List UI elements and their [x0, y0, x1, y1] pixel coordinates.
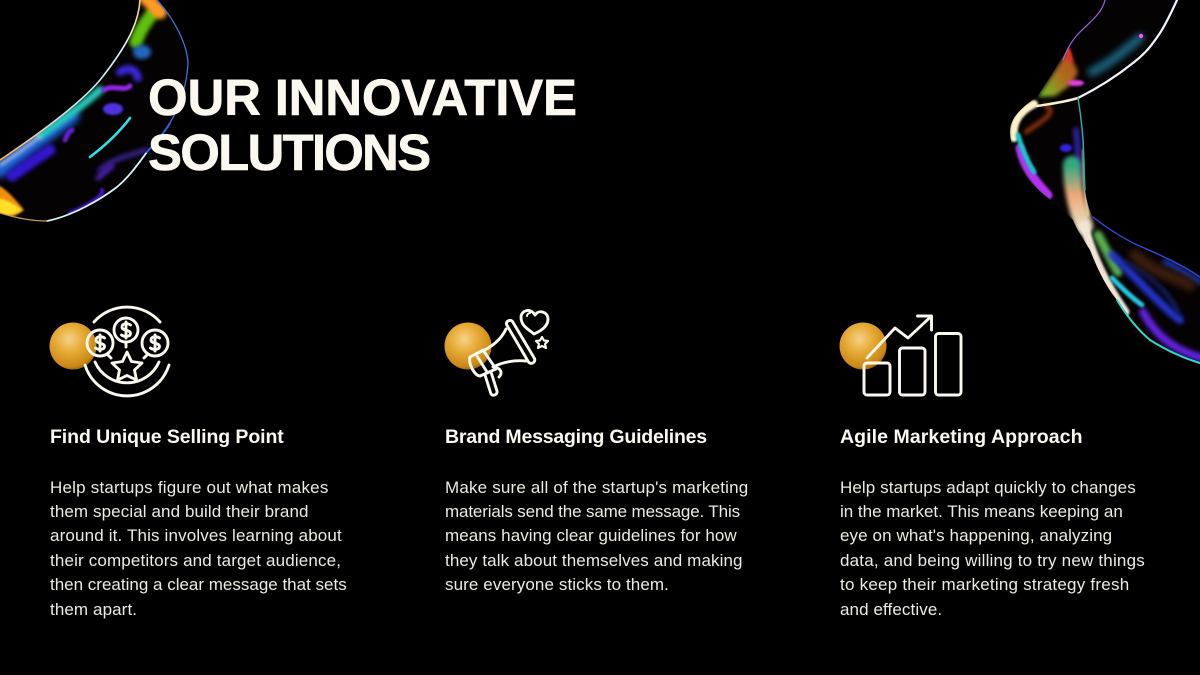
body text: them apart. — [50, 600, 137, 619]
body text: Help startups adapt quickly to changes — [840, 478, 1136, 496]
icon: megaphone with heart — [444, 309, 550, 397]
bubble: top-left iridescent film — [0, 0, 189, 222]
body text: eye on what's happening, analyzing — [840, 526, 1112, 545]
body text: they talk about themselves and making — [445, 551, 743, 570]
body text: Help startups figure out what makes — [50, 478, 329, 496]
body text: sure everyone sticks to them. — [445, 575, 669, 594]
body text — [840, 478, 1145, 619]
body text: materials send the same message. This — [445, 502, 740, 521]
body text: then creating a clear message that sets — [50, 575, 347, 594]
panel: agile marketing approach — [840, 314, 1145, 619]
body text: their competitors and target audience, — [50, 551, 341, 570]
heading: Find Unique Selling Point — [50, 426, 284, 448]
body text — [445, 478, 748, 594]
body text: to keep their marketing strategy fresh — [840, 575, 1129, 594]
title: SOLUTIONS — [148, 124, 429, 181]
body text: in the market. This means keeping an — [840, 502, 1123, 521]
title: OUR INNOVATIVE — [148, 69, 577, 126]
panel: brand messaging guidelines — [444, 309, 748, 594]
body text — [50, 478, 347, 619]
panel: find unique selling point — [50, 306, 347, 619]
body text: and effective. — [840, 600, 942, 619]
body text: them special and build their brand — [50, 502, 309, 521]
bubble: right iridescent twisted film — [1010, 0, 1200, 364]
body text: means having clear guidelines for how — [445, 526, 737, 545]
body text: data, and being willing to try new things — [840, 551, 1145, 570]
title — [148, 69, 577, 181]
icon: rising bar chart — [840, 314, 962, 396]
body text: Make sure all of the startup's marketing — [445, 478, 748, 496]
icon: coins and star — [50, 306, 170, 398]
heading: Agile Marketing Approach — [840, 426, 1083, 448]
heading: Brand Messaging Guidelines — [445, 426, 707, 448]
body text: around it. This involves learning about — [50, 526, 342, 545]
